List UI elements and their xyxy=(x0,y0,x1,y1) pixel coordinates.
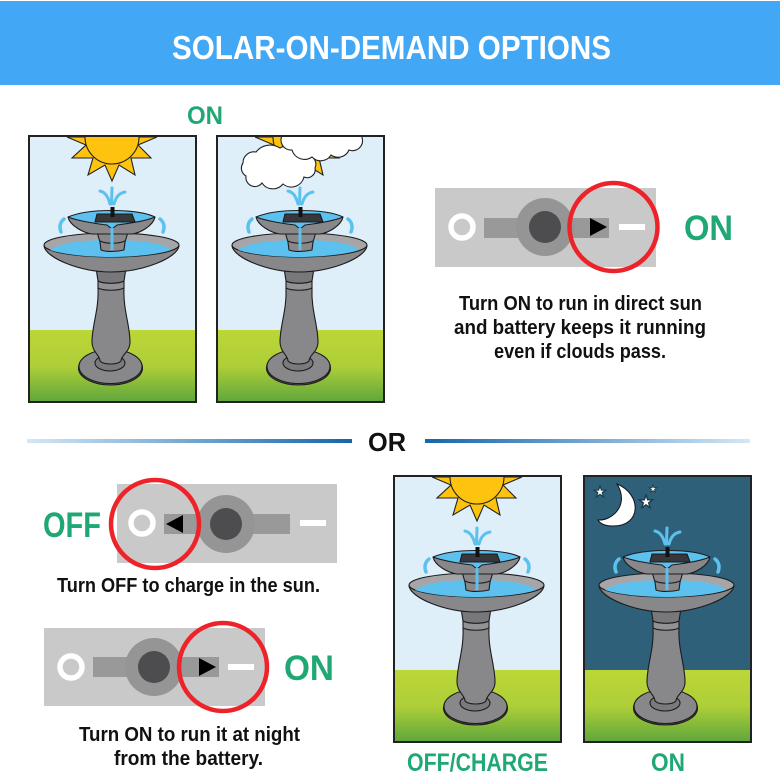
label: OFF/CHARGE: OFF/CHARGE xyxy=(407,749,548,777)
icon: stars xyxy=(594,485,657,508)
header banner xyxy=(0,1,780,85)
label: OFF beside switch: OFF xyxy=(43,506,101,545)
icon: upper cloud xyxy=(281,134,363,161)
icon: moon xyxy=(598,484,635,526)
panel: fountain running at night xyxy=(584,476,751,742)
instruction text: direct sun: and battery keeps it running xyxy=(454,317,706,339)
instruction text: night xyxy=(79,724,300,770)
instruction text: night: from the battery. xyxy=(114,748,263,770)
switch diagram: ON at night xyxy=(44,623,267,711)
panel: fountain with clouds passing xyxy=(217,110,384,402)
title: SOLAR-ON-DEMAND OPTIONS xyxy=(172,29,611,66)
panel: fountain in direct sun xyxy=(29,110,196,402)
divider with OR xyxy=(27,427,750,457)
label: ON beside switch: ON xyxy=(684,209,733,248)
instruction text: direct sun xyxy=(454,293,706,363)
switch diagram: ON xyxy=(435,183,658,271)
instruction text: direct sun: Turn ON to run in direct sun xyxy=(459,293,702,315)
icon: lower cloud xyxy=(241,145,316,189)
instruction text: direct sun: even if clouds pass. xyxy=(494,341,666,363)
instruction text: night: Turn ON to run it at night xyxy=(79,724,300,746)
divider with OR: OR xyxy=(368,427,406,457)
label: ON above fountains: ON xyxy=(187,102,223,130)
panel: fountain charging in the sun xyxy=(394,450,561,742)
switch diagram: OFF xyxy=(111,480,337,568)
label: ON beside lower switch: ON xyxy=(284,649,334,688)
label: ON at night: ON xyxy=(651,749,685,777)
instruction text: charge: Turn OFF to charge in the sun. xyxy=(57,575,320,597)
